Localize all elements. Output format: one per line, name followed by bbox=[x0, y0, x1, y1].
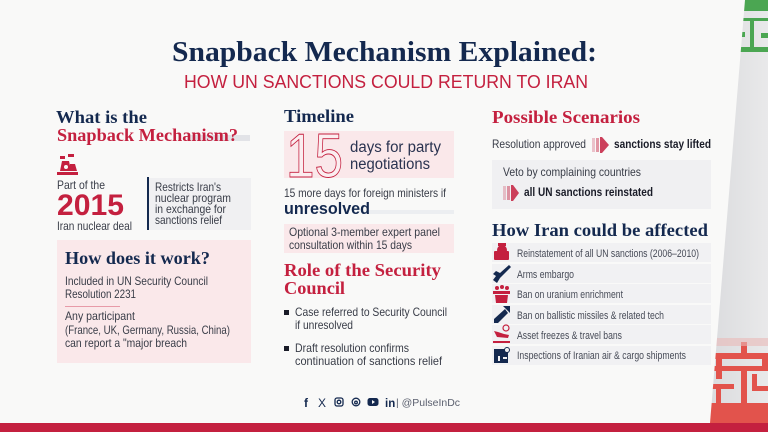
social footer bbox=[304, 396, 460, 410]
row: ballistic missiles: Ban on ballistic missiles & related tech bbox=[517, 310, 664, 322]
text: part of the 2015 iran nuclear deal: Iran nuclear deal bbox=[57, 220, 132, 233]
callout: restricts iran's program: sanctions relief bbox=[155, 214, 223, 227]
callout: restricts iran's program bbox=[147, 177, 251, 230]
scenario: resolution approved: sanctions stay lifted bbox=[614, 138, 711, 151]
heading: what is the snapback mechanism: What is the bbox=[56, 107, 147, 127]
heading: what is the snapback mechanism bbox=[56, 107, 250, 145]
green flag pattern bbox=[730, 0, 768, 52]
heading: possible scenarios: Possible Scenarios bbox=[492, 107, 640, 127]
text: part of the 2015 iran nuclear deal: Part of the bbox=[57, 179, 105, 192]
heading: role of the security council bbox=[284, 260, 441, 298]
row: arms embargo bbox=[492, 264, 711, 283]
bullet: draft resolution: continuation of sanctions relief bbox=[295, 355, 443, 368]
icon: facebook: f bbox=[304, 396, 309, 410]
callout: restricts iran's program: in exchange for bbox=[155, 203, 226, 216]
row: inspections bbox=[492, 346, 711, 365]
callout: 15 days for party negotiations: days for party bbox=[350, 139, 441, 156]
icon: linkedin: in bbox=[385, 398, 395, 410]
text: part of the 2015 iran nuclear deal: 2015 bbox=[57, 189, 124, 222]
text: any participant: Any participant bbox=[65, 310, 136, 323]
scenario: veto: Veto by complaining countries bbox=[503, 166, 641, 179]
bullet: draft resolution: Draft resolution confirms bbox=[295, 342, 409, 355]
icon: instagram bbox=[335, 398, 343, 406]
scenario: resolution approved: Resolution approved bbox=[492, 138, 586, 151]
panel: timeline bbox=[284, 106, 454, 253]
text: 15 more days unresolved bbox=[284, 187, 454, 218]
text: 15 more days unresolved: 15 more days for foreign ministers if bbox=[284, 187, 447, 200]
scenario: veto bbox=[492, 160, 711, 209]
heading: what is the snapback mechanism: Snapback Mechanism? bbox=[57, 125, 238, 145]
row: arms embargo: Arms embargo bbox=[517, 269, 574, 281]
text: 15 more days unresolved: unresolved bbox=[284, 199, 370, 218]
heading: role of the security council: Role of the Security bbox=[284, 260, 441, 280]
text: resolution 2231: Included in UN Security Council bbox=[65, 275, 208, 288]
panel: role of the security council bbox=[284, 260, 447, 368]
row: reinstatement: Reinstatement of all UN sanctions (2006–2010) bbox=[517, 248, 699, 260]
icon: arrows bbox=[503, 185, 519, 201]
row: ballistic missiles bbox=[492, 305, 711, 324]
scenario: veto: all UN sanctions reinstated bbox=[524, 186, 653, 199]
handle: | @PulseInDc bbox=[396, 397, 460, 409]
title: Snapback Mechanism Explained: bbox=[172, 36, 597, 68]
callout: restricts iran's program: nuclear program bbox=[155, 192, 231, 205]
row: uranium enrichment bbox=[492, 284, 711, 303]
row: asset freezes bbox=[492, 325, 711, 344]
subtitle: HOW UN SANCTIONS COULD RETURN TO IRAN bbox=[184, 71, 588, 92]
icon: nuclear plant bbox=[57, 154, 78, 175]
row: asset freezes: Asset freezes & travel bans bbox=[517, 330, 622, 342]
icon: x: X bbox=[318, 396, 326, 410]
text: resolution 2231 bbox=[65, 275, 208, 301]
panel: what is the snapback mechanism bbox=[56, 107, 251, 233]
heading: timeline: Timeline bbox=[284, 106, 354, 126]
row: inspections: Inspections of Iranian air & cargo shipments bbox=[517, 350, 686, 362]
callout: expert panel bbox=[284, 224, 454, 253]
text: any participant: (France, UK, Germany, Russia, China) bbox=[65, 324, 230, 337]
panel: how does it work bbox=[57, 240, 251, 363]
text: any participant bbox=[65, 310, 230, 350]
panel: possible scenarios bbox=[492, 107, 711, 209]
bullet: case referred: if unresolved bbox=[295, 319, 353, 332]
callout: 15 days for party negotiations: negotiations bbox=[350, 156, 430, 173]
bottom crimson bar bbox=[0, 423, 768, 432]
panel: how iran could be affected bbox=[492, 220, 711, 365]
heading: how iran could be affected: How Iran could be affected bbox=[492, 220, 708, 240]
bullet: draft resolution bbox=[284, 342, 443, 368]
icon: youtube bbox=[368, 398, 378, 406]
bullet: case referred: Case referred to Security Council bbox=[295, 306, 447, 319]
text: resolution 2231: Resolution 2231 bbox=[65, 288, 136, 301]
red flag pattern bbox=[704, 342, 768, 423]
scenario: resolution approved bbox=[492, 137, 711, 153]
heading: role of the security council: Council bbox=[284, 278, 345, 298]
icon: arrows bbox=[592, 137, 609, 153]
row: uranium enrichment: Ban on uranium enrichment bbox=[517, 289, 623, 301]
bullet: case referred bbox=[284, 306, 447, 332]
callout: expert panel: consultation within 15 days bbox=[289, 239, 412, 252]
row: reinstatement bbox=[492, 243, 711, 262]
callout: 15 days for party negotiations bbox=[284, 122, 454, 191]
iran flag background strip bbox=[700, 0, 768, 432]
text: any participant: can report a "major breach bbox=[65, 337, 187, 350]
callout: restricts iran's program: Restricts Iran's bbox=[155, 181, 221, 194]
text: part of the 2015 iran nuclear deal bbox=[57, 179, 132, 233]
heading: how does it work: How does it work? bbox=[65, 248, 210, 268]
callout: 15 days for party negotiations: 15 bbox=[286, 122, 343, 191]
callout: expert panel: Optional 3-member expert panel bbox=[289, 226, 440, 239]
icon: threads bbox=[352, 398, 360, 406]
